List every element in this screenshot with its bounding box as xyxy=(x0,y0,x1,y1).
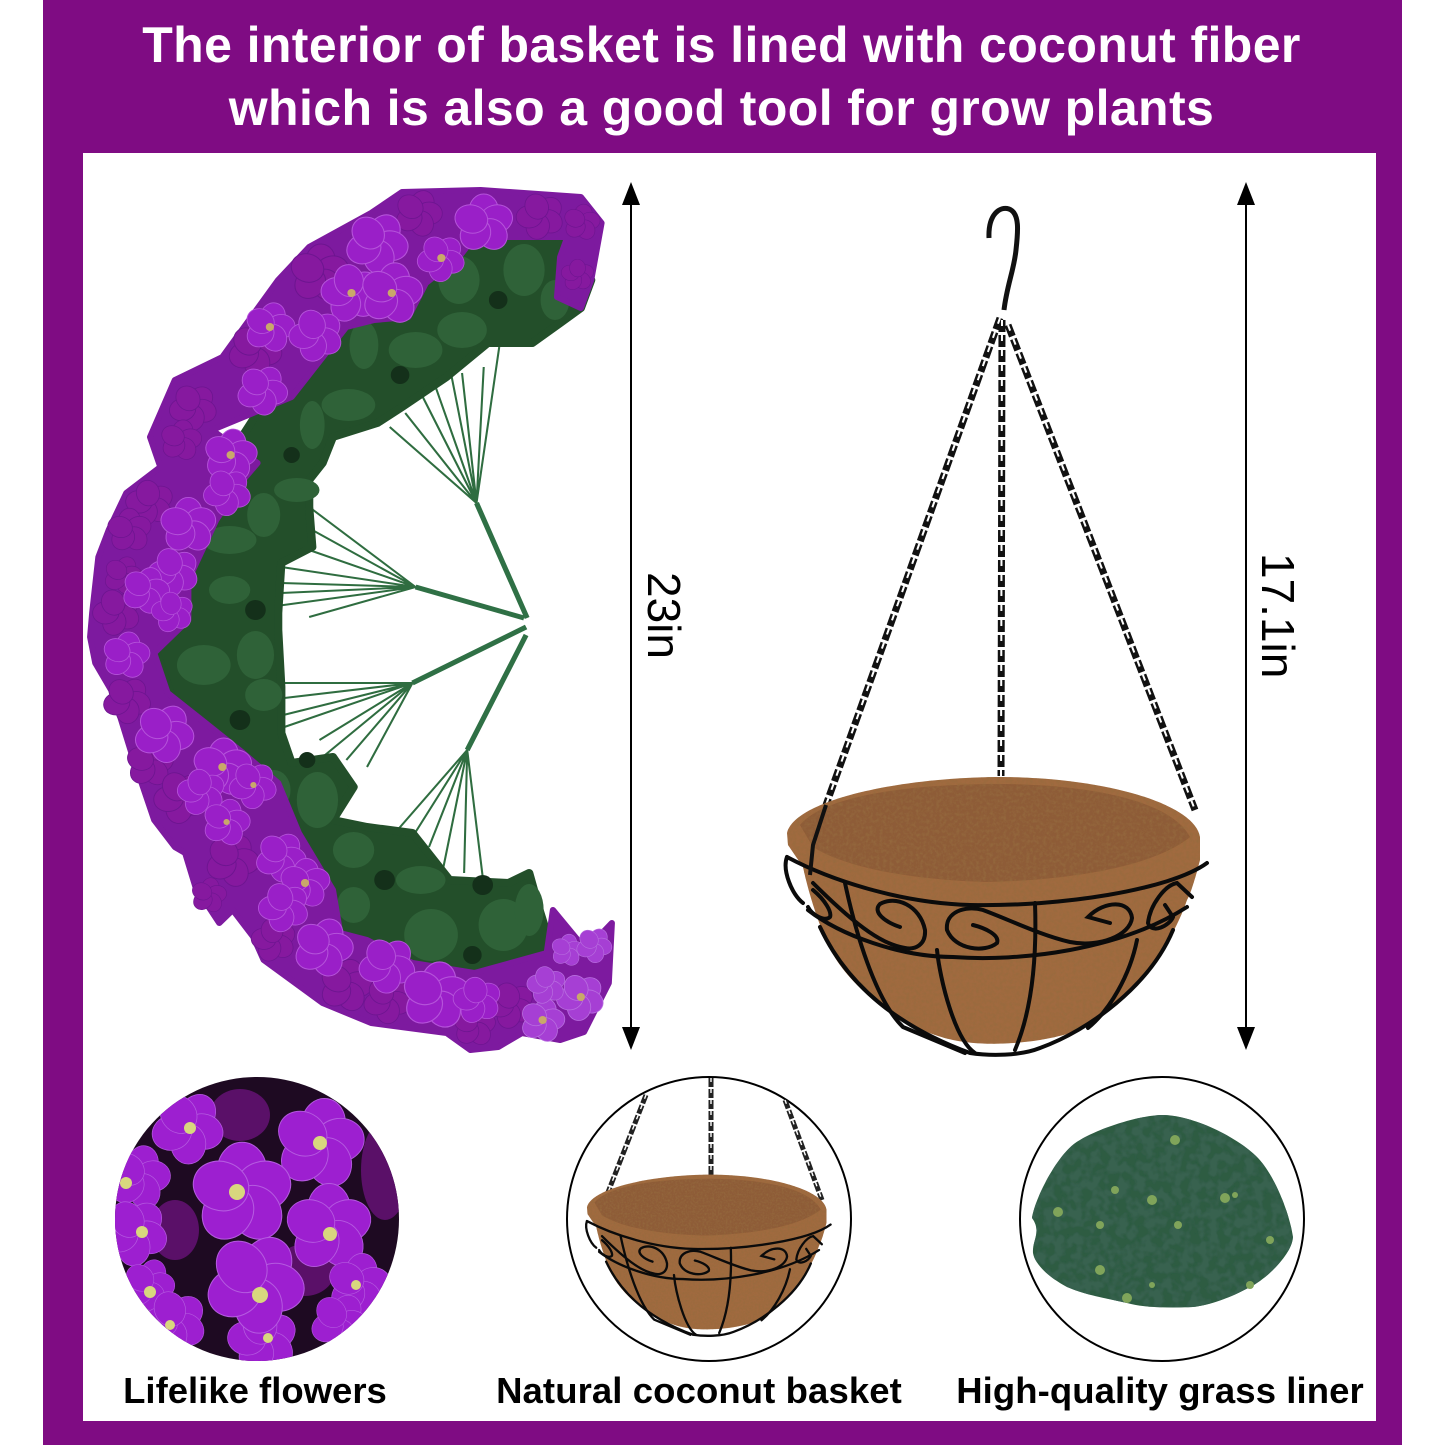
title xyxy=(142,17,1301,136)
chain over basket rim xyxy=(810,805,826,875)
arrow: 17.1in height xyxy=(1237,182,1255,1050)
title: which is also a good tool for grow plants xyxy=(229,80,1214,136)
circle: grass liner xyxy=(1020,1077,1304,1361)
dark flowers xyxy=(80,182,605,1050)
flower bouquet crescent xyxy=(80,182,620,1050)
caption: lifelike flowers: Lifelike flowers xyxy=(123,1370,387,1411)
circle: lifelike flowers xyxy=(115,1077,399,1361)
caption: grass liner: High-quality grass liner xyxy=(956,1370,1364,1411)
purple flower mass xyxy=(90,190,612,1050)
circle: coconut basket xyxy=(567,1077,851,1361)
dimension label: 23in: 23in xyxy=(638,572,690,659)
pale flowers at the tip xyxy=(513,920,620,1049)
foliage xyxy=(152,230,591,990)
main illustration xyxy=(87,182,1305,1362)
leaves xyxy=(177,244,569,961)
flower centres xyxy=(218,254,585,1024)
dimension label: 17.1in: 17.1in xyxy=(1252,553,1304,678)
hanging basket xyxy=(786,208,1207,1055)
arrow: 23in height xyxy=(622,182,640,1050)
white content panel xyxy=(83,153,1376,1421)
bright flowers xyxy=(96,194,516,1038)
title: The interior of basket is lined with coconut fiber xyxy=(142,17,1301,73)
green stems xyxy=(269,347,527,877)
hook and chains xyxy=(826,208,1195,810)
caption: natural coconut basket: Natural coconut basket xyxy=(496,1370,902,1411)
